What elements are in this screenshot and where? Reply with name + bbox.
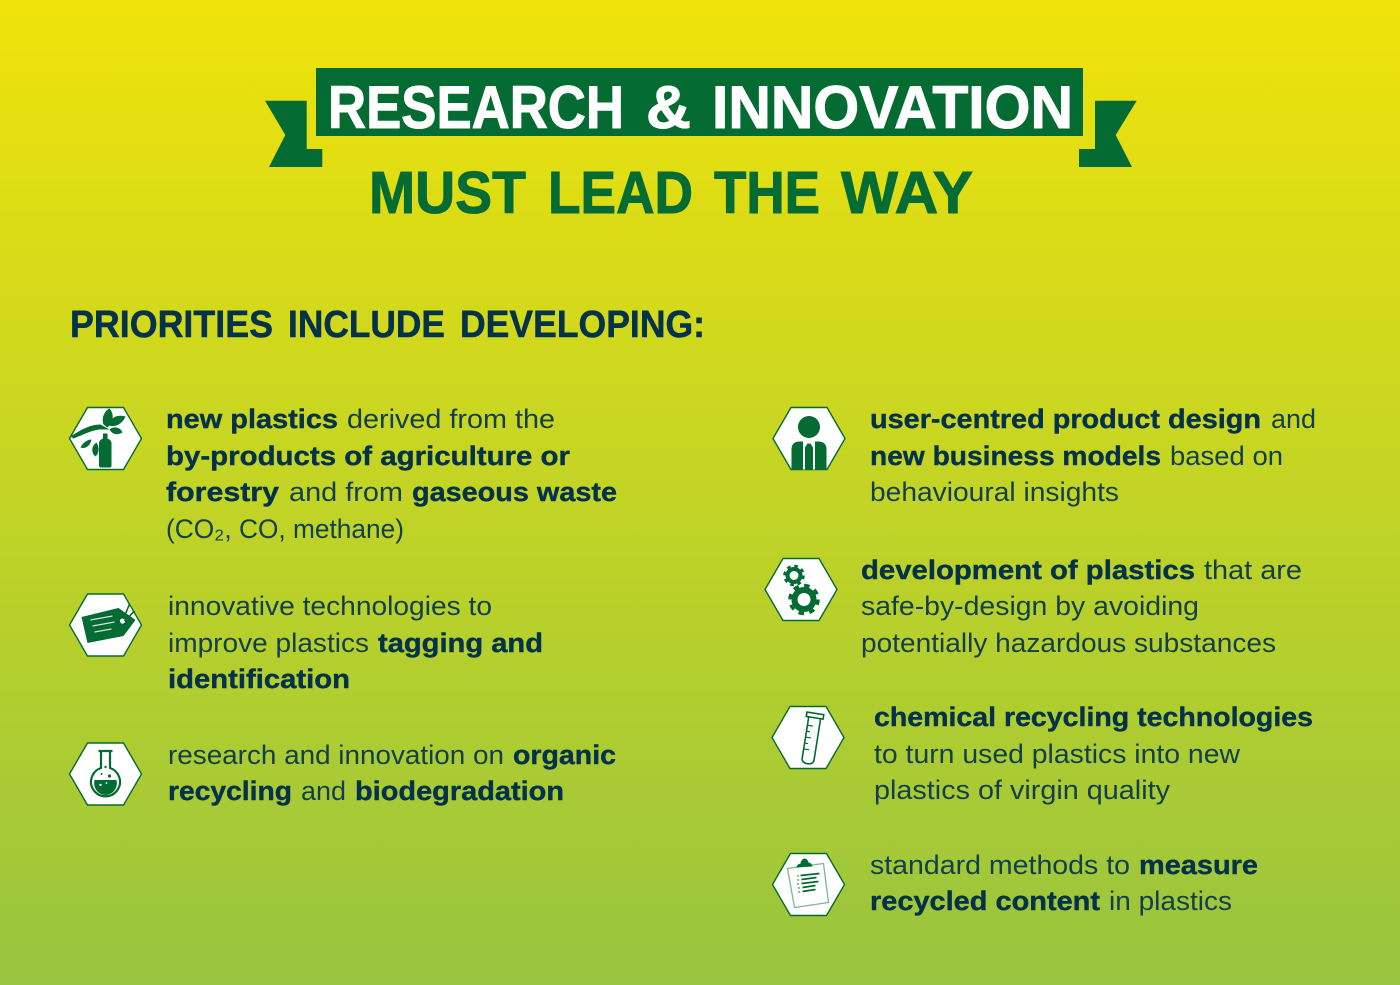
item: tagging [70, 591, 543, 694]
item: new plastics [70, 404, 617, 544]
icon: tag [70, 594, 142, 656]
text: tagging: identification [168, 664, 350, 694]
text: user-centred design: behavioural insights [870, 477, 1119, 507]
item: safe-by-design [765, 555, 1302, 658]
section heading: PRIORITIES [70, 304, 273, 346]
text: measure recycled content: in plastics [1109, 886, 1232, 916]
text: measure recycled content [870, 850, 1258, 916]
title line two: THE [714, 160, 820, 226]
ribbon left tail [265, 101, 322, 167]
ribbon main band [316, 68, 1083, 136]
text: user-centred design: based on [1170, 441, 1283, 471]
text: chemical recycling: to turn used plastics into new [874, 739, 1241, 769]
text: tagging: improve plastics [168, 628, 369, 658]
title line two: WAY [841, 160, 973, 226]
title line two: LEAD [548, 160, 693, 226]
text: safe-by-design: that are [1204, 555, 1302, 585]
icon: branch and bottle [70, 408, 142, 470]
text: tagging: tagging and [378, 628, 543, 658]
title banner [265, 68, 1137, 167]
item: organic recycling [70, 740, 616, 806]
text: measure recycled content: standard methods to [870, 850, 1130, 880]
text: chemical recycling: chemical recycling technologies [874, 702, 1313, 732]
text: organic recycling: organic [513, 740, 616, 770]
text: user-centred design: new business models [870, 441, 1161, 471]
text: new plastics [166, 404, 617, 544]
text: chemical recycling: plastics of virgin quality [874, 775, 1171, 805]
text: organic recycling: and [301, 776, 346, 806]
text: user-centred design: and [1271, 404, 1316, 434]
text: organic recycling: research and innovation on [168, 740, 504, 770]
text: new plastics: (CO₂, CO, methane) [166, 514, 404, 544]
text: user-centred design: user-centred product design [870, 404, 1261, 434]
text: safe-by-design: safe-by-design by avoiding [861, 591, 1199, 621]
text: new plastics: by-products of agriculture or [166, 441, 571, 471]
icon: gears [765, 558, 837, 620]
text: tagging [168, 591, 543, 694]
title line one: & [646, 74, 691, 141]
text: new plastics: and from [289, 477, 403, 507]
ribbon right tail [1079, 101, 1137, 167]
title line two: MUST [369, 160, 526, 226]
item: user-centred design [773, 404, 1316, 507]
text: organic recycling: biodegradation [355, 776, 564, 806]
text: safe-by-design [861, 555, 1302, 658]
text: safe-by-design: development of plastics [861, 555, 1195, 585]
title line two [369, 160, 973, 226]
text: tagging: innovative technologies to [168, 591, 492, 621]
text: measure recycled content: recycled content [870, 886, 1100, 916]
title line one [328, 74, 1073, 141]
section heading: INCLUDE [288, 304, 445, 346]
text: safe-by-design: potentially hazardous substances [861, 628, 1276, 658]
icon: flask [70, 743, 142, 805]
title line one: INNOVATION [712, 74, 1073, 141]
item: chemical recycling [772, 702, 1313, 805]
text: new plastics: forestry [166, 477, 279, 507]
text: new plastics: new plastics [166, 404, 338, 434]
text: organic recycling: recycling [168, 776, 292, 806]
section heading [70, 304, 705, 346]
icon: person [773, 408, 845, 470]
text: chemical recycling [874, 702, 1313, 805]
section heading: DEVELOPING: [460, 304, 705, 346]
text: organic recycling [168, 740, 616, 806]
text: new plastics: gaseous waste [412, 477, 617, 507]
item: measure recycled content [772, 850, 1258, 916]
icon: clipboard [772, 854, 844, 916]
icon: test tube [772, 706, 844, 768]
title line one: RESEARCH [328, 74, 624, 141]
text: measure recycled content: measure [1139, 850, 1258, 880]
text: new plastics: derived from the [347, 404, 555, 434]
text: user-centred design [870, 404, 1316, 507]
